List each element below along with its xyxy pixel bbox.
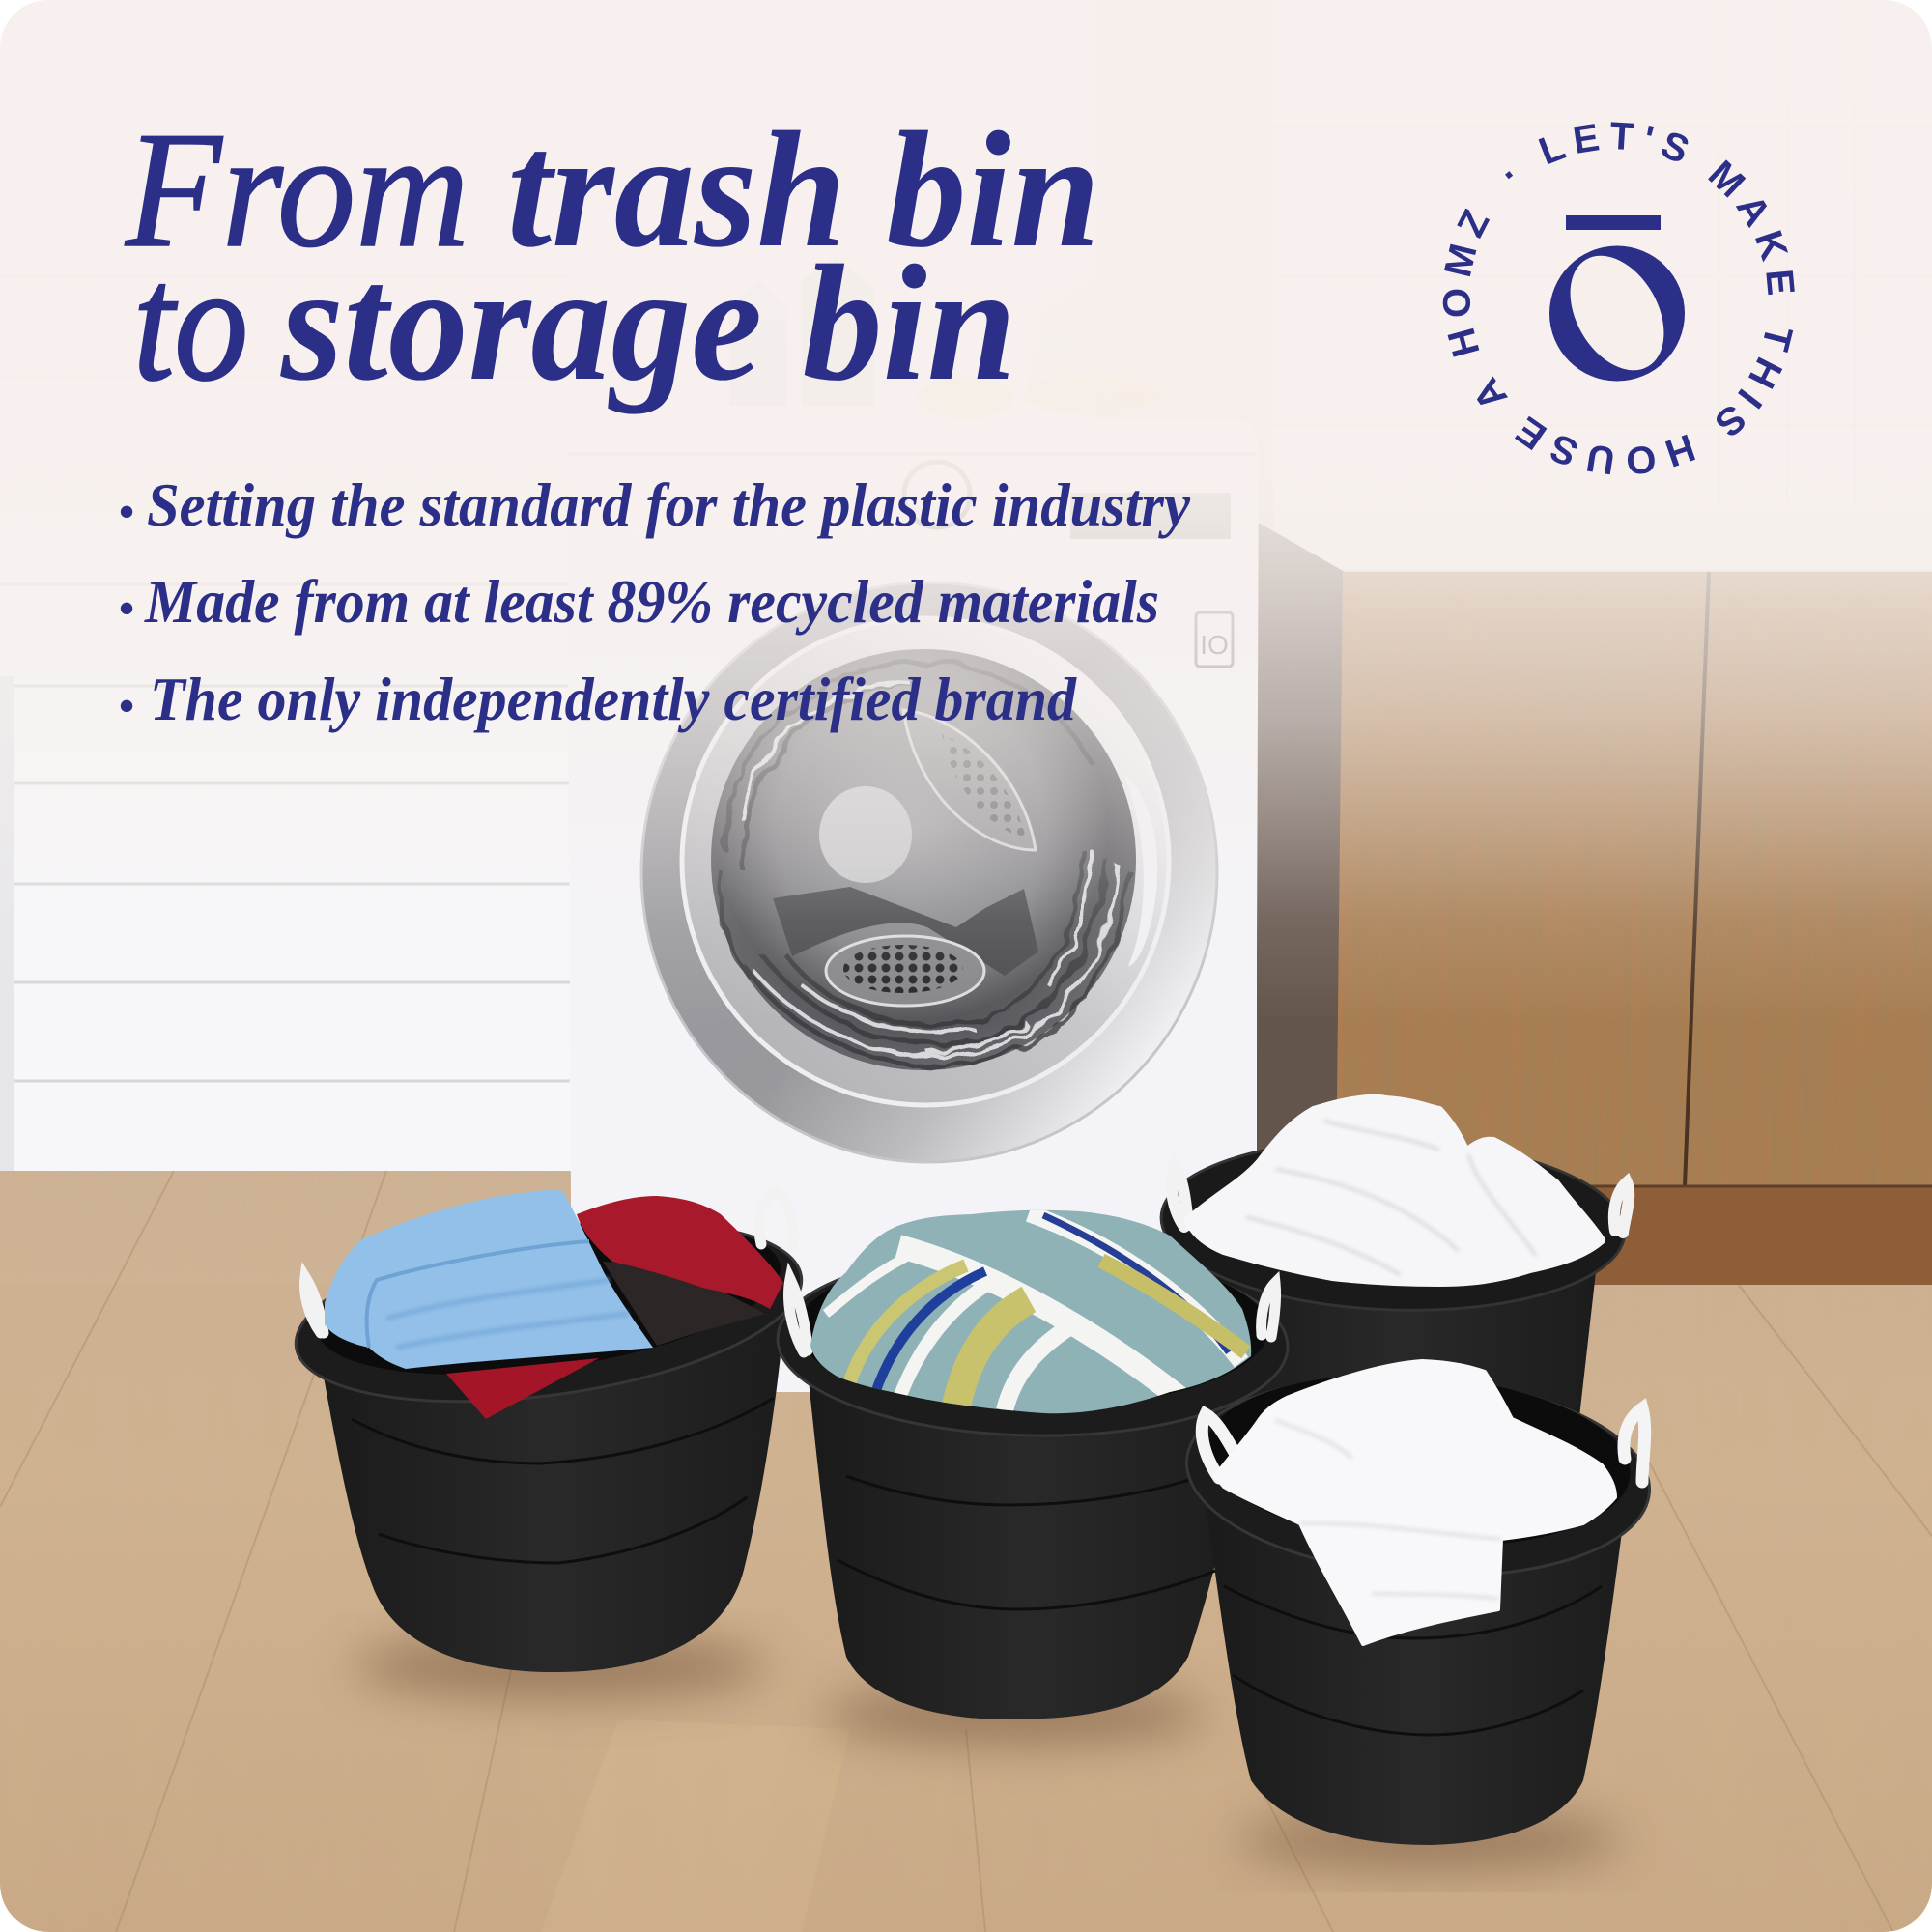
ribs — [838, 1471, 1215, 1609]
red cloth — [577, 1196, 783, 1309]
wooden cabinet — [1336, 572, 1932, 1186]
rim — [1158, 1132, 1628, 1318]
door catch — [1128, 828, 1157, 966]
tub: front right with white cloth — [1179, 1361, 1657, 1845]
bullet list — [119, 470, 1191, 733]
handles — [1172, 1165, 1629, 1233]
tub: back right with white towels — [1158, 1098, 1629, 1546]
washer door ring — [641, 582, 1217, 1162]
rim — [285, 1194, 812, 1430]
wall planks — [14, 684, 570, 1082]
white cloth — [1215, 1361, 1615, 1644]
title: to — [133, 232, 248, 415]
bottles and laundry on the washer — [729, 256, 1219, 419]
handles — [789, 1279, 1276, 1352]
drum — [711, 649, 1136, 1070]
wall column — [1096, 0, 1273, 541]
top fade overlay — [0, 0, 1932, 1024]
bullet 3: The only independently certified brand — [150, 665, 1077, 733]
left wall edge — [0, 742, 14, 1171]
drum ripples — [720, 662, 1128, 1065]
bullet 3: • — [119, 681, 134, 730]
wall — [0, 0, 1932, 1188]
title — [125, 99, 1100, 415]
bullet 2: Made from at least 89% recycled materials — [144, 567, 1159, 636]
lower drum paddle — [826, 936, 984, 1006]
ribs — [1224, 1586, 1602, 1735]
title: From — [125, 99, 469, 282]
tub: left with blue towel and red cloth — [285, 1190, 812, 1672]
washer control panel — [902, 460, 1231, 539]
dark cloth — [603, 1262, 765, 1346]
handles — [1202, 1408, 1645, 1482]
logo badge — [1443, 122, 1795, 475]
bullet 2: • — [119, 583, 134, 633]
counter top — [1343, 570, 1932, 572]
title: storage bin — [280, 232, 1016, 415]
washer IO badge — [1196, 612, 1233, 667]
tub: centre with striped towel — [776, 1210, 1290, 1719]
floor shadows — [353, 1634, 1623, 1869]
circular slogan: · LET'S MAKE THIS HOUSE A HOMZ — [1443, 122, 1795, 475]
ribs — [352, 1398, 774, 1563]
upper drum paddle — [903, 710, 1036, 850]
washer IO badge: IO — [1200, 630, 1229, 660]
title: trash bin — [507, 99, 1100, 282]
drum hub — [819, 786, 912, 883]
handles — [305, 1191, 793, 1333]
washing machine — [567, 419, 1259, 1392]
logo mark: o with macron — [1549, 215, 1685, 386]
rim — [1179, 1361, 1657, 1590]
bullet 1: • — [119, 487, 134, 536]
white towels — [1188, 1098, 1602, 1283]
blue towel — [325, 1190, 653, 1369]
plinth — [1594, 1188, 1932, 1285]
door inner ring — [682, 618, 1169, 1105]
floor — [0, 1171, 1932, 1932]
bullet 1: Setting the standard for the plastic industry — [147, 470, 1191, 539]
drum arm — [773, 887, 1038, 976]
striped towel — [810, 1210, 1251, 1413]
red flap — [446, 1358, 599, 1419]
recess between washer and cabinet — [1257, 522, 1345, 1198]
rim — [776, 1245, 1290, 1440]
